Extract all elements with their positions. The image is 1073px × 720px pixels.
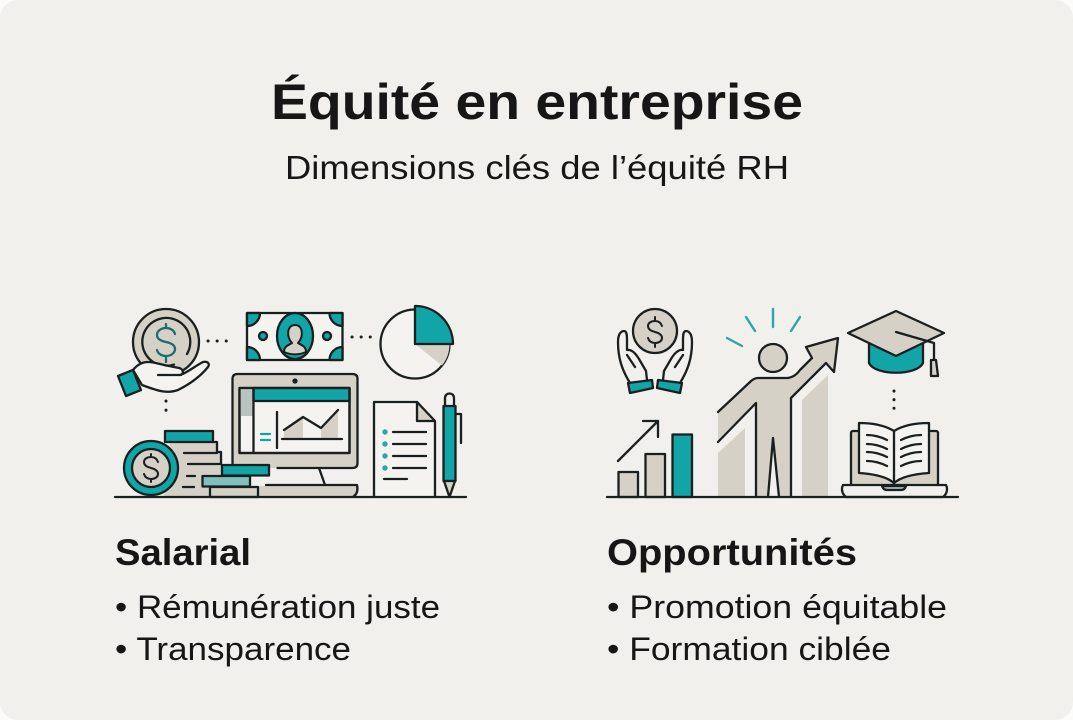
ground line: salarial (115, 496, 466, 498)
icon: pen (444, 394, 461, 497)
icon: computer monitor (232, 374, 358, 497)
icon: stacked bills (202, 465, 269, 497)
heading: Opportunités: Opportunités (607, 532, 857, 573)
text block: opportunités bullets (607, 589, 947, 667)
icon: rising bar chart (618, 421, 692, 497)
text block: opportunités bullets: • Formation ciblée (607, 631, 891, 667)
subtitle: Dimensions clés de l’équité RH (285, 149, 789, 186)
icon: pie chart (380, 306, 453, 378)
heading: Salarial: Salarial (115, 532, 251, 573)
icon: hands holding coin (618, 309, 692, 393)
illustration: opportunités (607, 309, 958, 497)
text block: salarial bullets: • Rémunération juste (115, 589, 440, 625)
text block: opportunités bullets: • Promotion équitable (607, 589, 947, 625)
icon: coin in hand (118, 309, 209, 396)
dotted connector (892, 391, 896, 409)
title: Équité en entreprise (271, 74, 803, 130)
text block: salarial bullets (115, 589, 440, 667)
illustration: salarial (115, 306, 466, 497)
icon: rays (727, 309, 800, 346)
icon: person with arrow (718, 338, 838, 497)
icon: banknote (247, 313, 342, 360)
text block: salarial bullets: • Transparence (115, 631, 351, 667)
icon: background columns (718, 375, 828, 497)
icon: graduation cap (848, 311, 944, 376)
ground line: opportunités (607, 496, 958, 498)
icon: coin stack (124, 431, 222, 497)
icon: document (374, 402, 435, 497)
icon: open book on laptop (842, 423, 947, 497)
dotted connectors (166, 337, 372, 419)
